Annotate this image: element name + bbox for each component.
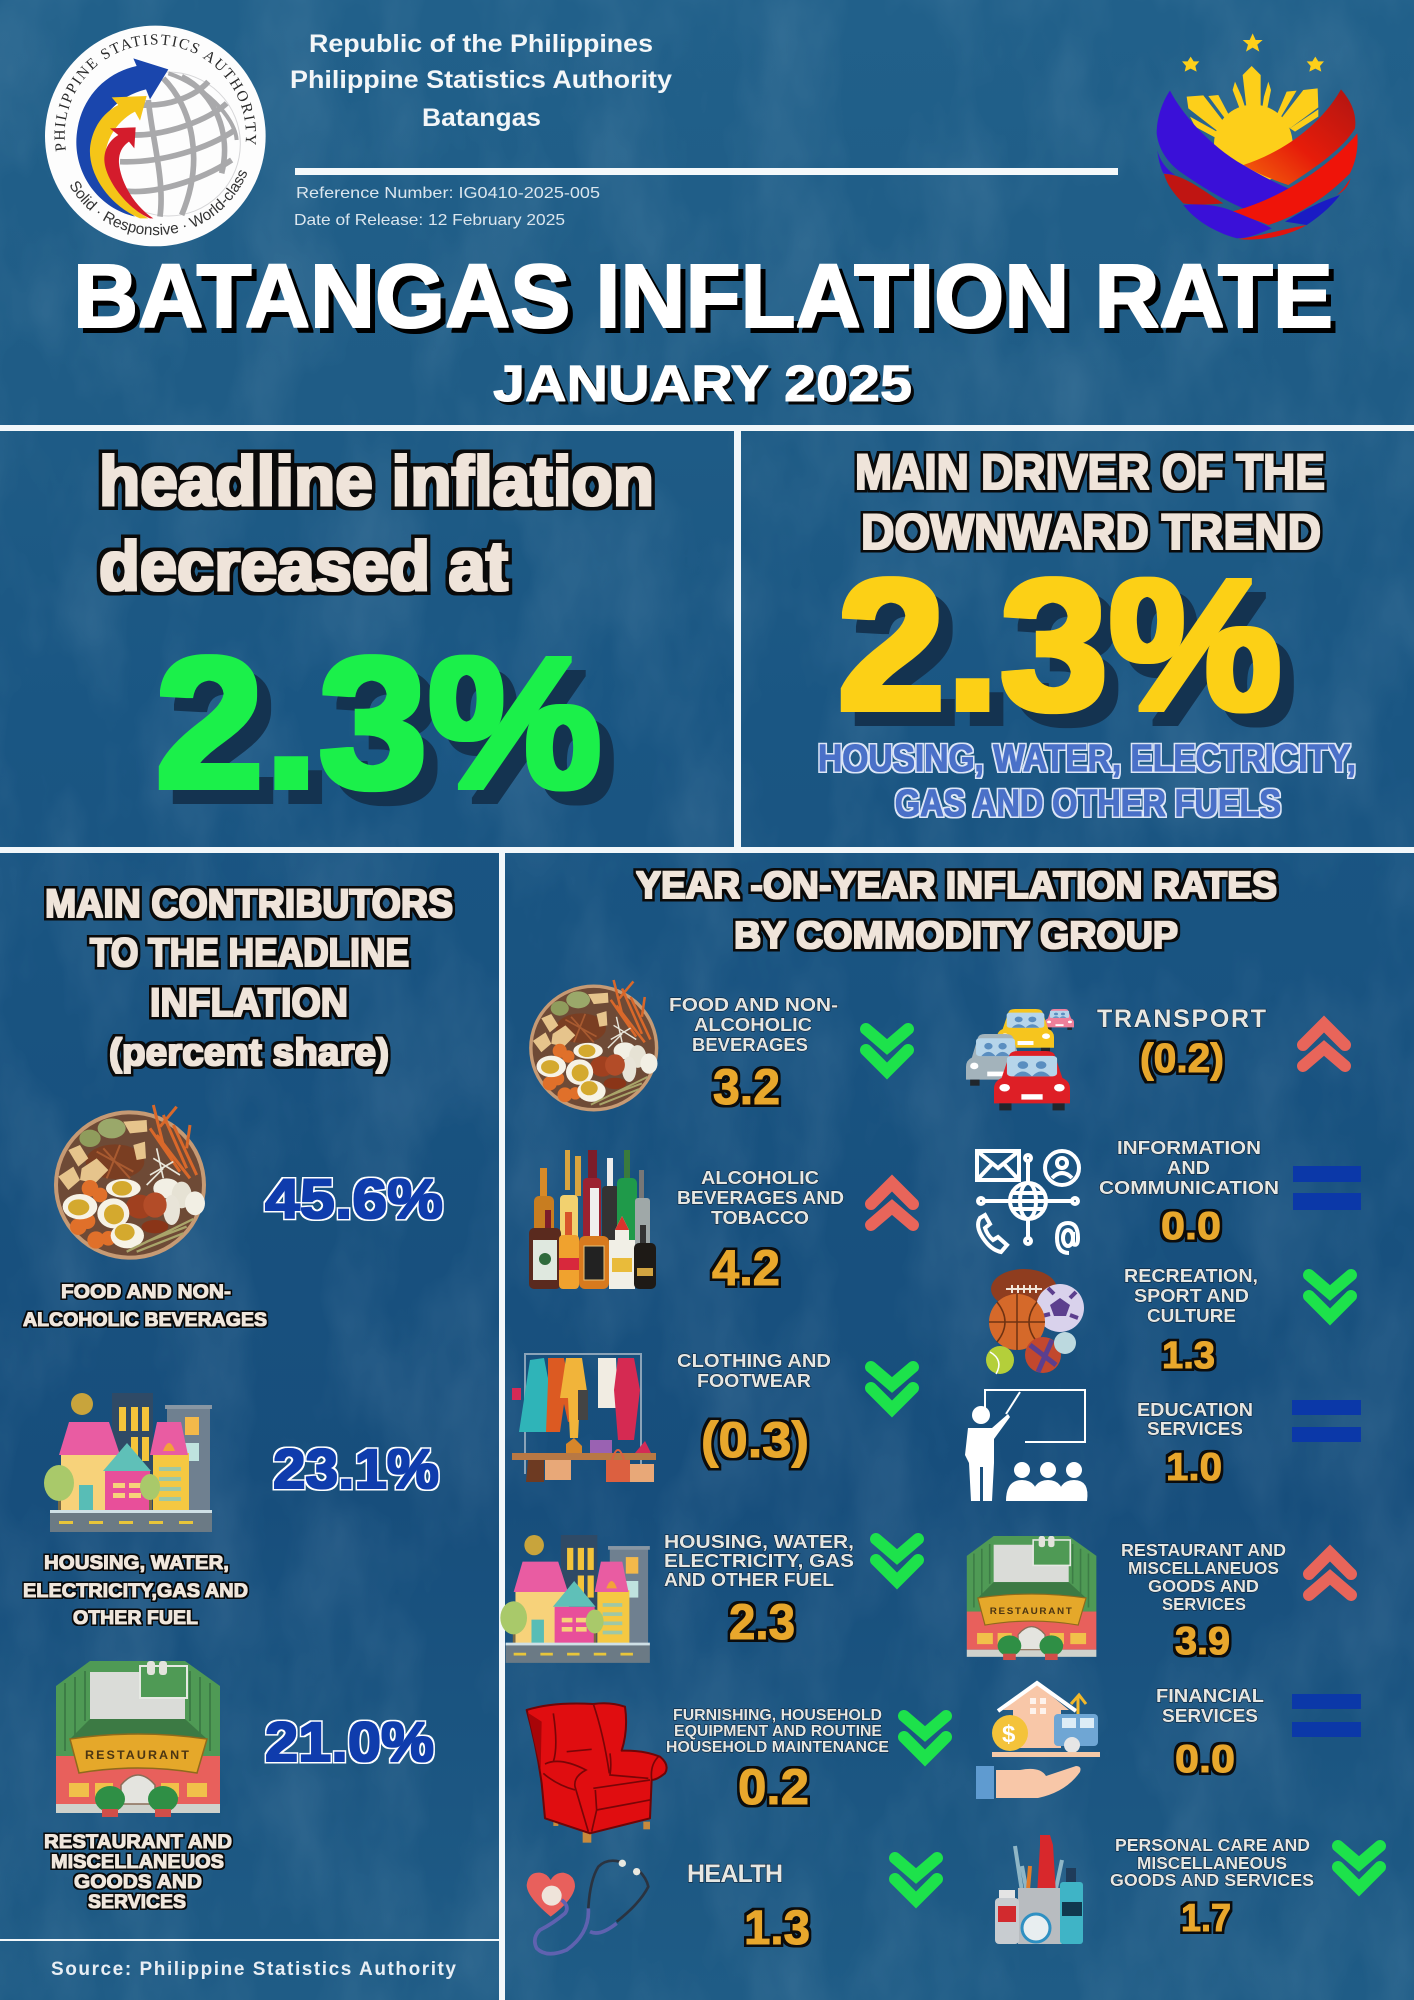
- organisation text: Philippine Statistics Authority: [290, 66, 672, 94]
- value: 21.0%: [265, 1710, 434, 1773]
- item: health: [527, 1858, 937, 1955]
- value: 1.0: [1166, 1446, 1222, 1489]
- icon: clothing rack: [512, 1354, 656, 1482]
- label: HOUSEHOLD MAINTENANCE: [666, 1739, 889, 1756]
- label: BEVERAGES AND: [677, 1187, 844, 1208]
- label: RESTAURANT AND: [44, 1832, 232, 1853]
- panel dividers: [0, 425, 1414, 2000]
- value: (0.3): [701, 1412, 809, 1468]
- panel: headline inflation: [99, 442, 654, 827]
- label: [1121, 1540, 1286, 1614]
- icon: restaurant: [56, 1661, 220, 1817]
- item: food: [529, 980, 908, 1115]
- label: [1110, 1835, 1314, 1890]
- label: EDUCATION: [1137, 1399, 1253, 1420]
- label: SERVICES: [1162, 1705, 1258, 1726]
- logo: Philippine Statistics Authority seal: PHILIPPINE STATISTICS AUTHORITY: [54, 34, 256, 152]
- label: [23, 1553, 248, 1629]
- value: 0.0: [1175, 1738, 1235, 1781]
- item: housing: [500, 1531, 918, 1663]
- icon: red armchair: [527, 1703, 667, 1843]
- icon: heart and stethoscope: [527, 1860, 648, 1954]
- title: BATANGAS INFLATION RATE: [73, 247, 1333, 347]
- icon: houses: [500, 1535, 650, 1663]
- arrow down: [895, 1858, 937, 1900]
- heading: TO THE HEADLINE: [90, 931, 409, 975]
- icon: cars: [966, 1009, 1074, 1110]
- item: recreation: [986, 1265, 1351, 1377]
- contributor: restaurant: [44, 1661, 434, 1913]
- value: 1.7: [1181, 1897, 1231, 1940]
- label: HOUSING, WATER,: [664, 1531, 854, 1552]
- label: SPORT AND: [1134, 1285, 1249, 1306]
- icon: connected globe: [977, 1151, 1079, 1253]
- label: [1156, 1685, 1264, 1726]
- label: RESTAURANT AND: [1121, 1540, 1286, 1560]
- source: Source: Philippine Statistics Authority: [51, 1959, 456, 1980]
- label: TOBACCO: [711, 1207, 809, 1228]
- value: 3.9: [1175, 1620, 1230, 1663]
- label: OTHER FUEL: [73, 1608, 198, 1629]
- label: GOODS AND SERVICES: [1110, 1870, 1314, 1890]
- logo: Philippine sun and stars emblem: [1157, 33, 1358, 240]
- label: FOOD AND NON-: [61, 1282, 231, 1303]
- reference and release date: [294, 185, 600, 229]
- heading: MAIN CONTRIBUTORS: [45, 882, 453, 926]
- organisation text: Republic of the Philippines: [309, 30, 653, 58]
- logo: Philippine Statistics Authority seal: [45, 26, 266, 246]
- label: AND: [1167, 1157, 1210, 1178]
- label: CULTURE: [1147, 1305, 1236, 1326]
- icon: money, house and car on hand: $: [1002, 1721, 1016, 1748]
- value: 1.3: [1162, 1335, 1215, 1377]
- panel: year-on-year rates: [500, 865, 1380, 1955]
- heading: [855, 444, 1325, 560]
- label: FOOD AND NON-: [669, 994, 838, 1015]
- label: SERVICES: [1162, 1594, 1246, 1614]
- header rule: [295, 168, 1118, 175]
- logo: Philippine Statistics Authority seal: Solid · Responsive · World-class: [70, 170, 247, 236]
- value: 0.0: [1161, 1205, 1221, 1248]
- heading: BY COMMODITY GROUP: [734, 915, 1178, 957]
- heading: [45, 882, 453, 1074]
- label: MISCELLANEUOS: [1128, 1558, 1279, 1578]
- label: PERSONAL CARE AND: [1115, 1835, 1310, 1855]
- driver label: GAS AND OTHER FUELS: [895, 783, 1281, 825]
- organisation text: Batangas: [422, 104, 541, 132]
- item: furnishing: [527, 1703, 946, 1843]
- value: 23.1%: [273, 1437, 439, 1500]
- item: information and communication: [977, 1137, 1361, 1253]
- arrow down: [866, 1029, 908, 1071]
- icon: houses: [44, 1393, 212, 1532]
- label: MISCELLANEOUS: [1137, 1853, 1287, 1873]
- contributor: housing: [23, 1393, 439, 1629]
- label: HEALTH: [687, 1860, 783, 1888]
- label: BEVERAGES: [692, 1034, 808, 1055]
- label: [23, 1282, 267, 1331]
- label: RECREATION,: [1124, 1265, 1258, 1286]
- label: TRANSPORT: [1097, 1005, 1266, 1033]
- label: [1124, 1265, 1258, 1326]
- label: EQUIPMENT AND ROUTINE: [674, 1723, 882, 1740]
- no change bars: [1292, 1400, 1361, 1442]
- icon: food bowl: [54, 1105, 206, 1260]
- label: ALCOHOLIC: [701, 1167, 819, 1188]
- label: [1099, 1137, 1279, 1198]
- icon: restaurant: [967, 1536, 1096, 1660]
- heading: decreased at: [99, 527, 508, 605]
- big number: 2.3%: [837, 542, 1282, 749]
- label: [1137, 1399, 1253, 1439]
- item: financial: [976, 1683, 1361, 1799]
- item: restaurant: [967, 1536, 1351, 1663]
- label: FINANCIAL: [1156, 1685, 1264, 1706]
- arrow up: [871, 1183, 913, 1225]
- no change bars: [1293, 1166, 1361, 1210]
- label: MISCELLANEUOS: [51, 1852, 224, 1873]
- reference and release date: Reference Number: IG0410-2025-005: [296, 185, 600, 202]
- value: 2.3: [729, 1594, 795, 1650]
- heading: INFLATION: [150, 981, 348, 1025]
- arrow down: [871, 1367, 913, 1409]
- reference and release date: Date of Release: 12 February 2025: [294, 212, 565, 229]
- heading: MAIN DRIVER OF THE: [855, 444, 1325, 500]
- label: GOODS AND: [1148, 1576, 1259, 1596]
- value: 45.6%: [265, 1167, 443, 1230]
- item: transport: [966, 1005, 1345, 1110]
- driver label: [818, 738, 1356, 825]
- label: [664, 1531, 854, 1590]
- organisation text: [290, 30, 672, 132]
- label: COMMUNICATION: [1099, 1177, 1279, 1198]
- no change bars: [1292, 1694, 1361, 1737]
- big number: 2.3%: [155, 620, 602, 827]
- arrow down: [904, 1716, 946, 1758]
- label: AND OTHER FUEL: [664, 1569, 834, 1590]
- icon: sports balls: [986, 1269, 1084, 1374]
- label: HOUSING, WATER,: [44, 1553, 229, 1574]
- heading: YEAR -ON-YEAR INFLATION RATES: [636, 865, 1277, 907]
- icon: bottles: [529, 1150, 656, 1289]
- label: ALCOHOLIC BEVERAGES: [23, 1310, 267, 1331]
- label: [669, 994, 838, 1055]
- label: [677, 1167, 844, 1228]
- heading: (percent share): [109, 1032, 389, 1074]
- value: 3.2: [713, 1059, 780, 1115]
- heading: DOWNWARD TREND: [861, 504, 1321, 560]
- contributor: food: [23, 1105, 443, 1331]
- icon: money, house and car on hand: [976, 1683, 1100, 1799]
- label: [677, 1350, 831, 1391]
- heading: [636, 865, 1277, 957]
- arrow down: [1338, 1846, 1380, 1888]
- item: personal care: [995, 1835, 1380, 1944]
- item: alcohol: [529, 1150, 913, 1296]
- arrow up: [1309, 1553, 1351, 1595]
- panel: main driver: [818, 444, 1356, 825]
- label: ALCOHOLIC: [694, 1014, 812, 1035]
- item: education: [965, 1390, 1361, 1501]
- value: (0.2): [1140, 1035, 1224, 1081]
- heading: [99, 442, 654, 605]
- icon: teacher and students: [965, 1390, 1087, 1501]
- driver label: HOUSING, WATER, ELECTRICITY,: [818, 738, 1356, 780]
- arrow up: [1303, 1024, 1345, 1066]
- label: ELECTRICITY,GAS AND: [23, 1581, 248, 1602]
- label: GOODS AND: [74, 1872, 202, 1893]
- subtitle: JANUARY 2025: [493, 355, 912, 412]
- item: clothing: [512, 1350, 913, 1482]
- label: FOOTWEAR: [697, 1370, 811, 1391]
- label: INFORMATION: [1117, 1137, 1261, 1158]
- label: [666, 1707, 889, 1756]
- panel: main contributors: [23, 882, 456, 1980]
- label: FURNISHING, HOUSEHOLD: [673, 1707, 882, 1724]
- label: SERVICES: [88, 1892, 186, 1913]
- icon: toiletries: [995, 1835, 1083, 1944]
- value: 0.2: [738, 1759, 809, 1815]
- label: ELECTRICITY, GAS: [664, 1550, 854, 1571]
- icon: food bowl: [529, 980, 658, 1111]
- arrow down: [1309, 1275, 1351, 1317]
- value: 1.3: [744, 1902, 810, 1955]
- header: [45, 26, 1358, 246]
- heading: headline inflation: [99, 442, 654, 520]
- label: CLOTHING AND: [677, 1350, 831, 1371]
- label: [44, 1832, 232, 1913]
- value: 4.2: [712, 1240, 780, 1296]
- label: SERVICES: [1147, 1418, 1243, 1439]
- arrow down: [876, 1539, 918, 1581]
